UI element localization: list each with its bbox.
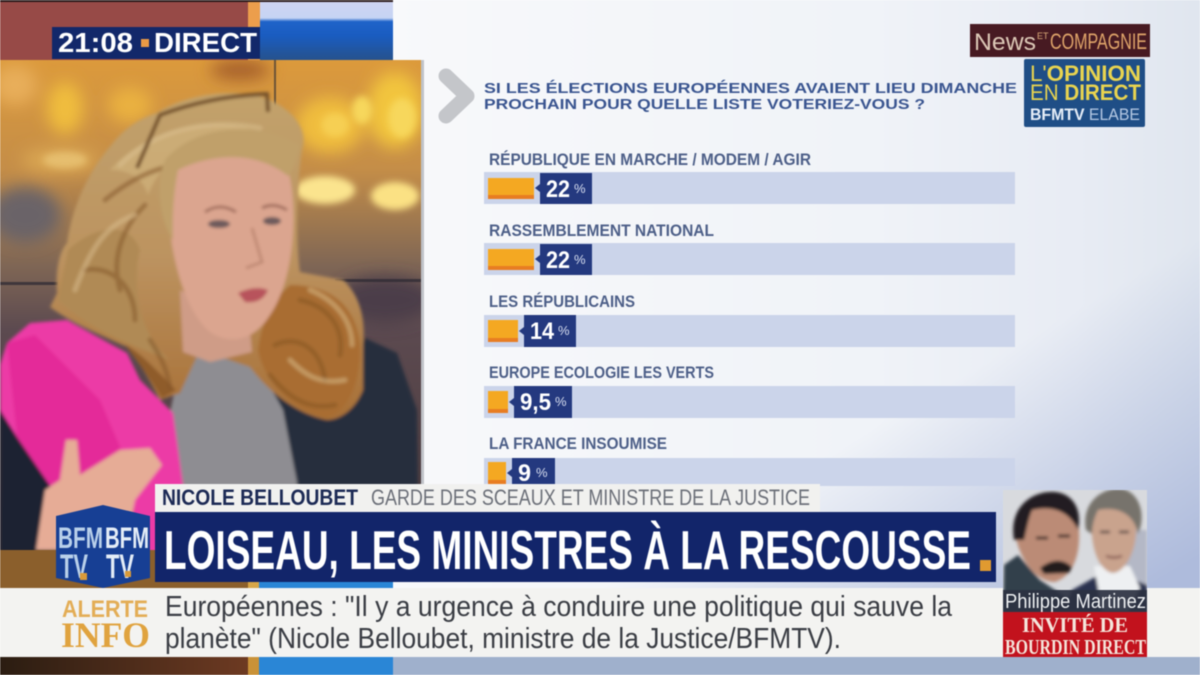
sunglasses on head [137,94,268,168]
portrait: Philippe Martinez [1003,492,1079,612]
grey top [168,356,300,485]
clock and direct label: 21:08 [58,27,133,58]
row: Europe Ecologie Les Verts: 9,5 [520,389,551,416]
portrait: Jean-Jacques Bourdin [1064,489,1147,612]
clock and direct label [52,27,260,59]
row: République en Marche [484,150,1015,204]
ticker text [165,591,953,655]
row: République en Marche: RÉPUBLIQUE EN MARCHE / MODEM / AGIR [489,150,811,169]
row: La France Insoumise: 9 [518,460,531,487]
poll question: SI LES ÉLECTIONS EUROPÉENNES AVAIENT LIEU DIMANCHE [484,80,1017,97]
row: Europe Ecologie Les Verts: % [555,394,567,409]
logo: News et Compagnie: COMPAGNIE [1050,29,1147,54]
row: Rassemblement National: % [574,252,586,267]
hair curl texture [75,125,352,406]
logo: BFM TV: TV [60,548,88,586]
row: Les Républicains: 14 [530,318,555,345]
logo: News et Compagnie: ET [1037,31,1049,41]
row: Les Républicains: % [558,323,570,338]
logo: BFM TV: BFM [105,522,149,555]
news ticker [0,588,1200,657]
lower third: name bar: NICOLE BELLOUBET [162,485,358,510]
row: Les Républicains [484,292,1015,347]
logo: L'opinion en direct [1024,59,1145,127]
poll question [484,80,1017,113]
lower third: name bar: GARDE DES SCEAUX ET MINISTRE DE LA JUSTICE [371,485,810,510]
neck [180,290,252,362]
bar chart: voting intentions [484,150,1015,487]
logo: BFM TV: TV [106,548,134,586]
bottom background strip [0,655,1200,675]
alert label: INFO [61,615,150,655]
hand [36,440,162,550]
ticker text: Européennes : "Il y a urgence à conduire une politique qui sauve la [165,591,953,623]
guest promo [1003,489,1147,659]
row: Les Républicains: LES RÉPUBLICAINS [489,292,635,311]
logo: News et Compagnie [970,24,1150,57]
row: La France Insoumise [484,435,1015,487]
row: La France Insoumise: LA FRANCE INSOUMISE [489,435,667,453]
studio background [0,60,435,550]
alert label: ALERTE [62,596,148,623]
row: Rassemblement National: RASSEMBLEMENT NATIONAL [489,222,714,240]
row: Europe Ecologie Les Verts [484,364,1015,418]
face [170,155,293,339]
right jacket [276,338,420,484]
nose [246,228,262,268]
panel: poll graphic background [393,0,1200,590]
chevron icon [446,76,467,116]
guest promo: BOURDIN DIRECT [1005,635,1146,659]
clock and direct label: DIRECT [154,27,257,58]
logo: BFM TV: BFM [58,522,103,555]
row: Europe Ecologie Les Verts: EUROPE ECOLOGIE LES VERTS [489,364,714,382]
poll question: PROCHAIN POUR QUELLE LISTE VOTERIEZ-VOUS ? [484,96,925,113]
mouth [238,288,268,302]
logo: BFM TV [56,505,150,588]
eyes [208,220,230,228]
ticker text: planète" (Nicole Belloubet, ministre de la Justice/BFMTV). [165,623,841,655]
row: Rassemblement National: 22 [546,247,570,274]
gap below studio photo [0,550,393,590]
logo: L'opinion en direct: BFMTV ELABE [1030,105,1140,124]
row: République en Marche: % [574,181,586,196]
logo: L'opinion en direct: EN DIRECT [1030,80,1142,105]
lower third: name bar [155,484,820,512]
logo: News et Compagnie: News [974,29,1036,56]
guest promo: Philippe Martinez [1005,591,1146,613]
pink scarf [0,320,183,560]
row: Rassemblement National [484,222,1015,275]
left jacket [0,412,56,550]
logo: L'opinion en direct: L'OPINION [1030,61,1141,86]
photo: studio guest [0,60,435,560]
forehead hair sweep [161,133,290,238]
guest promo: INVITÉ DE [1022,613,1128,637]
row: La France Insoumise: % [536,465,548,480]
row: République en Marche: 22 [546,176,570,203]
alert label [61,596,150,655]
top background strip [0,0,393,60]
photo right border [421,60,424,484]
hair [50,93,364,420]
